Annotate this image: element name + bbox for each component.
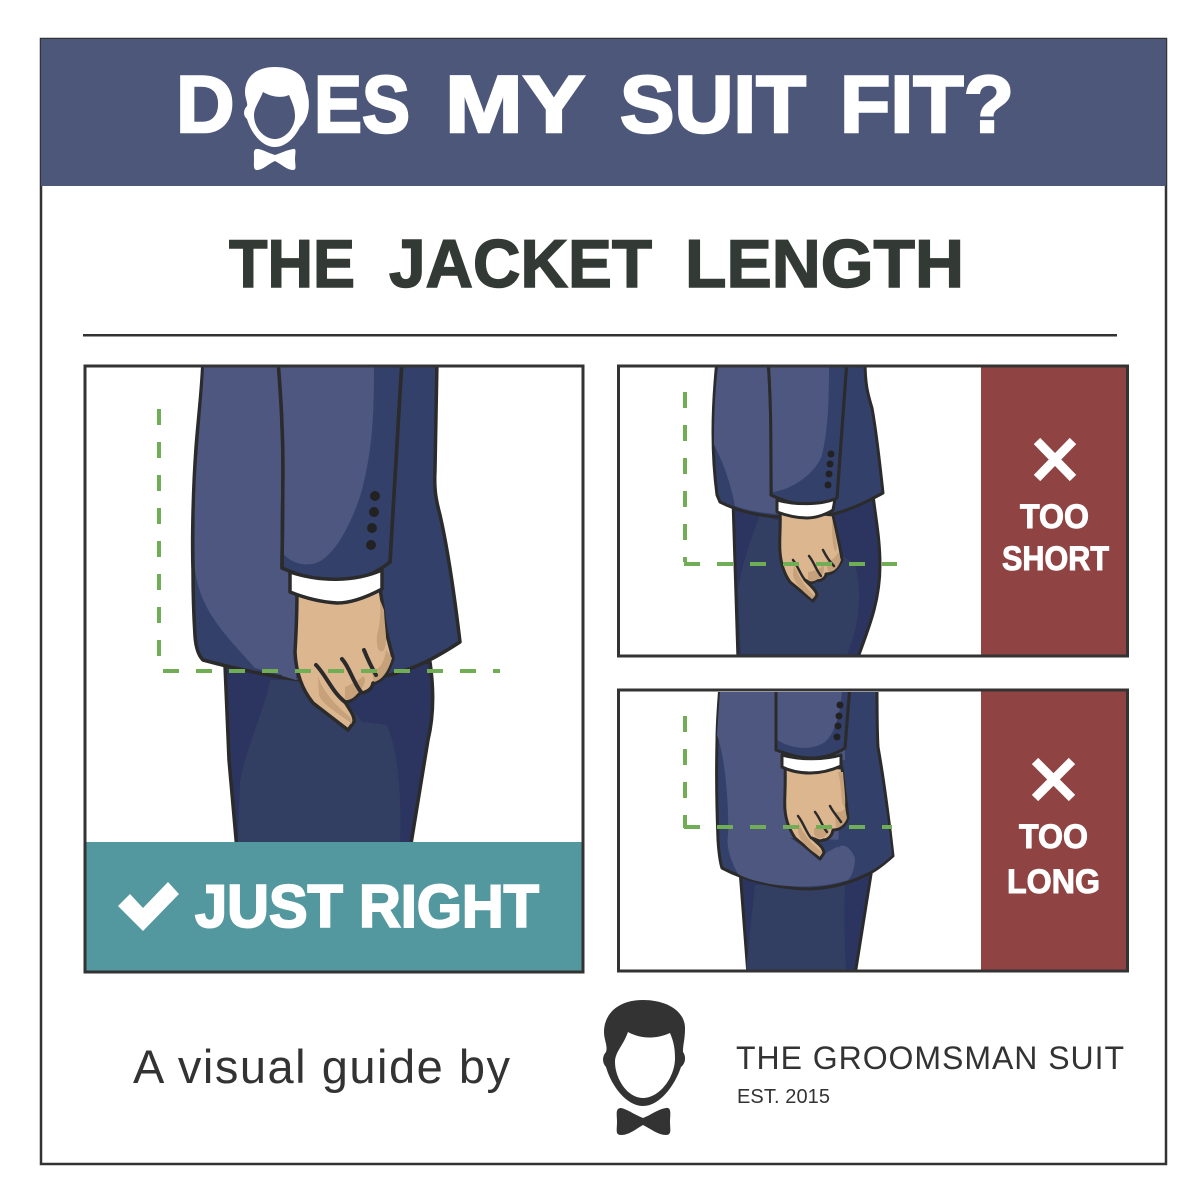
sleeve buttons <box>834 702 844 740</box>
label: too long: TOO <box>1019 818 1088 856</box>
established date: EST. 2015 <box>737 1086 830 1108</box>
label: too short: SHORT <box>1002 540 1109 578</box>
title: MY <box>445 60 585 150</box>
shirt cuff <box>290 570 382 603</box>
verdict band <box>981 690 1128 971</box>
icon: cross <box>1035 761 1072 798</box>
hand <box>785 765 848 859</box>
hand <box>780 510 842 601</box>
jacket body <box>717 685 893 889</box>
title: FIT? <box>840 60 1014 150</box>
sleeve <box>776 685 850 758</box>
brand name <box>736 1040 1124 1108</box>
sleeve buttons <box>824 450 834 488</box>
heading: JACKET <box>389 226 652 302</box>
hand <box>295 588 393 730</box>
jacket body <box>193 360 460 681</box>
trousers <box>733 495 880 660</box>
measure guide <box>684 392 897 564</box>
header banner <box>41 39 1166 186</box>
illustration: long jacket <box>684 685 893 975</box>
sleeve buttons <box>366 491 380 550</box>
footer credit text: A visual guide by <box>133 1040 510 1093</box>
heading <box>229 226 964 302</box>
label: too short <box>1002 498 1109 578</box>
title <box>176 60 1014 150</box>
title: ES <box>314 60 410 150</box>
icon: head with bow tie in title <box>244 67 306 170</box>
illustration: short jacket <box>684 360 897 660</box>
illustration: correct jacket length <box>159 360 500 850</box>
title: SUIT <box>620 60 806 150</box>
panel: just right <box>85 360 583 972</box>
icon: check mark <box>118 882 179 931</box>
icon: groomsman logo <box>603 1000 685 1135</box>
brand name: THE GROOMSMAN SUIT <box>736 1040 1124 1076</box>
sleeve light area <box>280 367 374 564</box>
label: too long <box>1007 818 1100 901</box>
shirt cuff <box>782 755 841 773</box>
verdict band <box>85 842 583 972</box>
jacket body <box>713 360 883 518</box>
label: too long: LONG <box>1007 863 1100 901</box>
verdict band <box>981 366 1128 656</box>
sleeve <box>768 360 847 505</box>
measure guide <box>684 716 892 828</box>
icon: cross <box>1037 441 1073 478</box>
shirt cuff <box>777 499 835 518</box>
jacket light area <box>195 367 300 680</box>
panel: too long <box>618 685 1128 975</box>
trousers <box>225 662 433 850</box>
measure guide <box>159 409 500 671</box>
heading: THE <box>229 226 355 302</box>
title: DO <box>176 60 311 150</box>
label: too short: TOO <box>1020 498 1089 536</box>
sleeve <box>278 360 402 582</box>
label: just right: JUST RIGHT <box>195 873 539 940</box>
heading rule <box>83 334 1117 336</box>
panel: too short <box>618 360 1128 660</box>
heading: LENGTH <box>685 226 964 302</box>
trousers <box>740 868 872 975</box>
